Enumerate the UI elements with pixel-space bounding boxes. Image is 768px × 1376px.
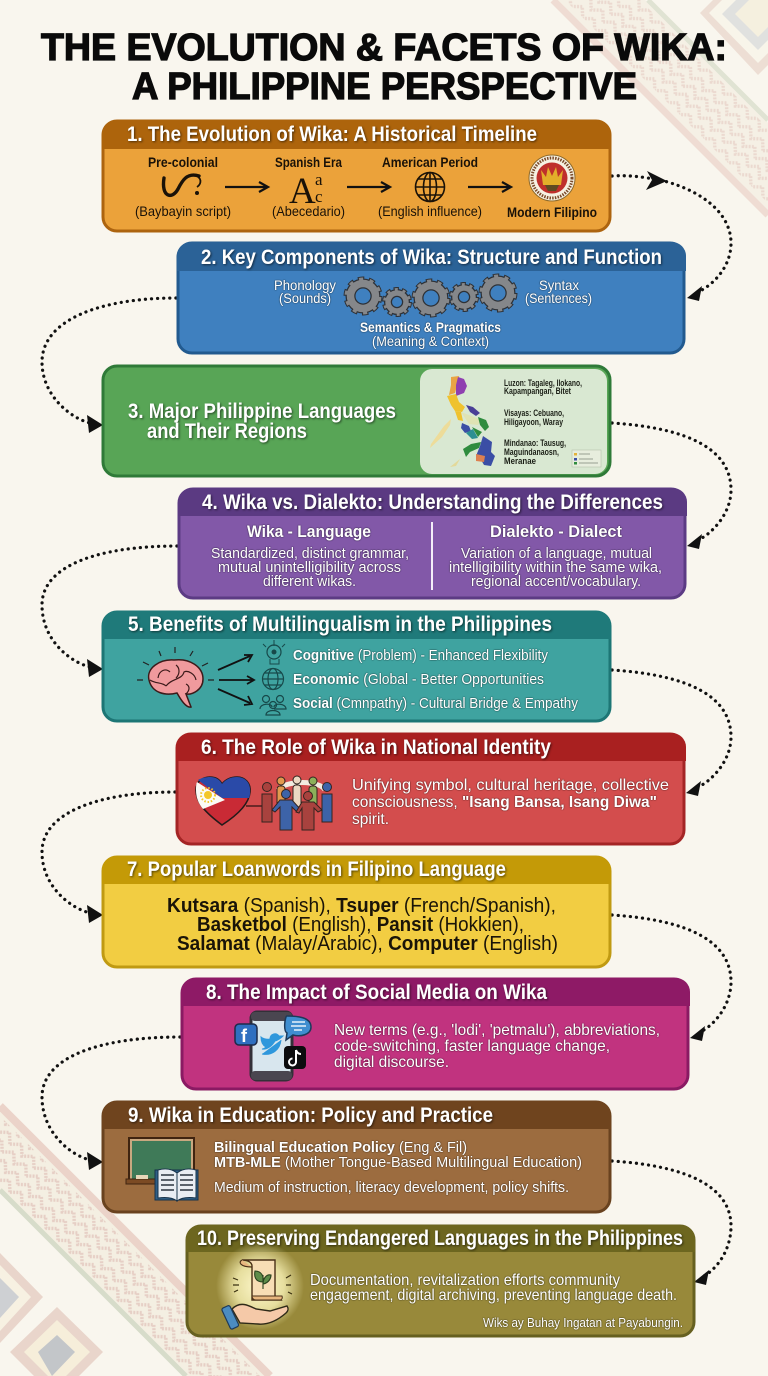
heading: 4. Wika vs. Dialekto: Understanding the Differences [202,491,663,514]
row: economic [262,668,544,690]
arrow: panel 5 to panel 6 [612,670,731,796]
connector [246,805,262,807]
arrow [347,182,390,192]
word list: Basketbol (English), Pansit (Hokkien), [197,914,524,936]
arrow: panel 7 to panel 8 [612,915,731,1041]
column: wika: Wika - Language [247,522,371,541]
text block: code-switching, faster language change, [334,1038,610,1055]
language list: Maguindanaosn, [504,447,559,458]
arrow: panel 1 to panel 2 [612,171,731,301]
map inset [420,369,607,474]
column: wika: Standardized, distinct grammar, [211,545,409,562]
step: Spanish era: c [315,187,323,206]
row: social: Social (Cmnpathy) - Cultural Bridge & Empathy [293,695,578,712]
arrows from brain [218,655,254,705]
column: dialekto: Dialekto - Dialect [490,522,622,541]
heading: 3. Major Philippine Languages [128,400,396,423]
title: A PHILIPPINE PERSPECTIVE [132,66,637,108]
row: cognitive [263,640,548,664]
label: syntax [525,277,592,306]
icon: people circle [262,776,332,830]
step: pre-colonial: Pre-colonial [148,154,218,170]
column: dialekto: Variation of a language, mutual [461,545,652,562]
heading: 8. The Impact of Social Media on Wika [206,981,547,1004]
icon: phone with social apps [235,1012,311,1080]
arrow: panel 4 to panel 5 [42,546,177,677]
column: wika: mutual unintelligibility across [218,559,401,576]
text block: Bilingual Education Policy (Eng & Fil) [214,1139,467,1156]
language list: Meranae [504,456,536,467]
arrow: panel 3 to panel 4 [612,423,731,549]
map of the Philippines [430,376,495,467]
text block [214,1139,582,1196]
panel 7: loanwords [102,856,611,967]
arrow: panel 6 to panel 7 [42,792,175,923]
icon: scroll with sprout in a hand [216,1242,304,1330]
step: modern Filipino seal [507,155,597,220]
arrow: panel 2 to panel 3 [42,298,176,433]
panel 10: endangered languages [186,1225,695,1336]
column: wika: different wikas. [263,573,356,590]
heading: 9. Wika in Education: Policy and Practice [128,1104,493,1127]
word list: Salamat (Malay/Arabic), Computer (English) [177,933,558,955]
step: American period: American Period [382,154,478,170]
row: cognitive: Cognitive (Problem) - Enhanced Flexibility [293,647,548,664]
arrow [468,182,511,192]
text block: New terms (e.g., 'lodi', 'petmalu'), abbreviations, [334,1022,660,1039]
column: dialekto: intelligibility within the same wika, [449,559,662,576]
icon: brain [137,647,214,707]
label: syntax: Syntax [539,277,579,293]
language list: Luzon: Tagaleg, Ilokano, [504,378,582,389]
map legend [572,450,601,467]
panel 2: key components [177,242,686,353]
language list: Hiligayoon, Waray [504,417,564,428]
arrow: panel 9 to panel 10 [612,1161,731,1285]
language list: Visayas: Cebuano, [504,408,564,419]
language list: Kapampangan, Bitet [504,386,572,397]
arrow [225,182,268,192]
heading: 5. Benefits of Multilingualism in the Philippines [128,613,552,636]
panel 3: major languages [103,366,610,476]
step: Spanish era: a [315,170,323,189]
step: American period: (English influence) [378,203,482,219]
language list: Mindanao: Tausug, [504,438,566,449]
heading: 7. Popular Loanwords in Filipino Language [127,858,506,881]
step: Spanish era: (Abecedario) [272,203,345,219]
column: dialekto: regional accent/vocabulary. [471,573,641,590]
step: pre-colonial: (Baybayin script) [135,203,231,219]
row: economic: Economic (Global - Better Opportunities [293,671,544,688]
text block: Medium of instruction, literacy development, policy shifts. [214,1179,569,1196]
text block: engagement, digital archiving, preventing language death. [310,1287,677,1304]
text block: Unifying symbol, cultural heritage, collective [352,777,669,794]
column: wika [211,522,409,590]
tagline: Wiks ay Buhay Ingatan at Payabungin. [483,1315,683,1330]
icon: chalkboard and book [126,1138,198,1201]
icon: Philippine flag heart [196,777,250,825]
step: Spanish era: Spanish Era [275,154,342,170]
label: semantics and pragmatics: (Meaning & Context) [372,333,489,349]
panel 8: social media [181,978,690,1089]
label: phonology [274,277,336,306]
panel 5: benefits of multilingualism [102,611,611,721]
panel 1: historical timeline [102,120,611,231]
text block: spirit. [352,811,389,828]
heading [128,400,396,443]
word list: Kutsara (Spanish), Tsuper (French/Spanish), [167,895,556,917]
language list [504,378,582,467]
label: phonology: (Sounds) [279,290,331,306]
label: phonology: Phonology [274,277,336,293]
title [41,27,727,108]
text block [310,1272,677,1304]
heading: and Their Regions [147,420,307,443]
text block [352,777,669,828]
heading: 1. The Evolution of Wika: A Historical Timeline [127,123,537,146]
word list [167,895,558,955]
text block [334,1022,660,1071]
label: syntax: (Sentences) [525,290,592,306]
step: Spanish era: A [289,171,316,212]
icon: phone with social apps: f [241,1026,248,1046]
text block: Documentation, revitalization efforts community [310,1272,620,1289]
step: modern Filipino seal: Modern Filipino [507,204,597,220]
panel 9: education [102,1101,611,1212]
heading: 10. Preserving Endangered Languages in the Philippines [197,1227,683,1250]
step: pre-colonial [135,154,231,219]
heading: 6. The Role of Wika in National Identity [201,736,551,759]
text block: consciousness, "Isang Bansa, Isang Diwa" [352,794,657,811]
icon: gears [346,276,514,314]
text block: digital discourse. [334,1054,449,1071]
arrow: panel 8 to panel 9 [42,1037,180,1170]
heading: 2. Key Components of Wika: Structure and Function [201,246,662,269]
divider [431,522,433,590]
label: semantics and pragmatics [360,319,501,349]
label: semantics and pragmatics: Semantics & Pragmatics [360,319,501,335]
panel 4: wika vs dialekto [178,488,687,598]
step: American period [378,154,482,219]
panel 6: national identity [176,733,686,844]
step: Spanish era [272,154,345,219]
column: dialekto [449,522,662,590]
text block: MTB-MLE (Mother Tongue-Based Multilingual Education) [214,1154,582,1171]
title: THE EVOLUTION & FACETS OF WIKA: [41,27,727,69]
